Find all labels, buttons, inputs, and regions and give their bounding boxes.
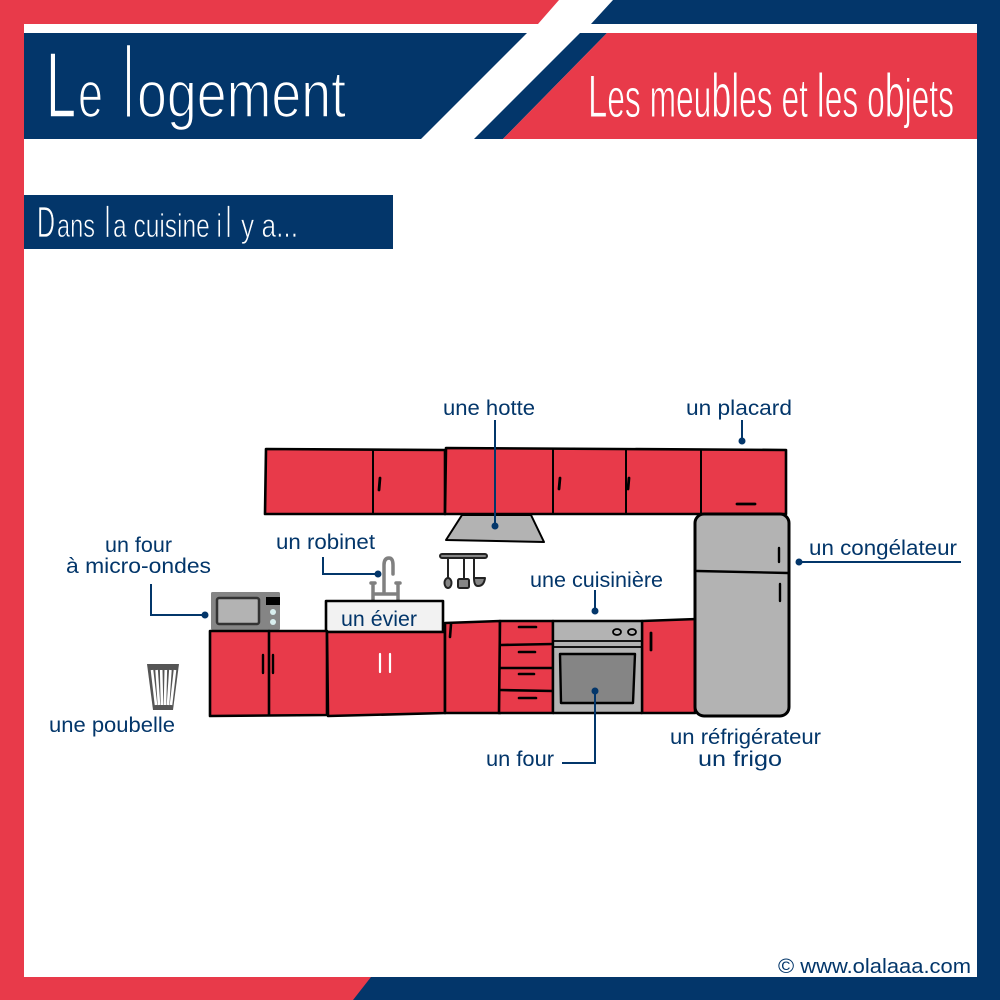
label: un robinet: un robinet — [276, 531, 375, 554]
label: une hotte: une hotte — [443, 397, 535, 420]
title: l — [124, 27, 133, 139]
trash bin — [147, 664, 179, 710]
label: un four: un four — [486, 748, 554, 771]
faucet — [371, 558, 400, 601]
label: un placard: un placard — [686, 397, 792, 420]
section heading — [24, 195, 393, 249]
section heading: l — [105, 198, 110, 247]
label: un four à micro-ondes: à micro-ondes — [66, 555, 211, 578]
label: un évier: un évier — [341, 608, 417, 631]
label: un congélateur: un congélateur — [809, 537, 957, 560]
copyright: © www.olalaaa.com — [778, 956, 971, 978]
hood — [446, 515, 544, 542]
subtitle: Les meubles et les objets — [588, 62, 954, 131]
kitchen illustration — [147, 448, 789, 716]
section heading: l — [226, 198, 231, 247]
label: une cuisinière: une cuisinière — [530, 569, 663, 592]
label: une poubelle: une poubelle — [49, 714, 175, 737]
label: une hotte — [443, 397, 535, 530]
section heading: D — [37, 198, 55, 247]
sink — [326, 601, 443, 632]
label: un robinet — [276, 531, 382, 578]
label: un four — [486, 688, 598, 771]
fridge and freezer — [695, 514, 789, 716]
stove and oven — [553, 621, 642, 713]
section heading: y a... — [241, 207, 298, 244]
label: un placard — [686, 397, 792, 444]
header band — [24, 33, 977, 139]
title: e — [78, 57, 103, 131]
section heading: a cuisine i — [113, 207, 222, 244]
label: un réfrigérateur, un frigo — [670, 726, 821, 771]
lower right cabinets — [445, 619, 697, 713]
label: un four à micro-ondes: un four — [105, 534, 172, 557]
microwave — [211, 592, 280, 630]
upper cabinets — [265, 448, 786, 514]
label: un four à micro-ondes — [66, 534, 211, 618]
label: un congélateur — [796, 537, 961, 566]
title: L — [46, 33, 76, 137]
title: ogement — [137, 57, 346, 131]
label: un réfrigérateur, un frigo: un réfrigérateur — [670, 726, 821, 749]
label: une cuisinière — [530, 569, 663, 614]
label: un réfrigérateur, un frigo: un frigo — [698, 748, 782, 771]
lower left cabinets — [210, 631, 445, 716]
utensil rack — [440, 554, 487, 588]
section heading: ans — [57, 207, 95, 244]
